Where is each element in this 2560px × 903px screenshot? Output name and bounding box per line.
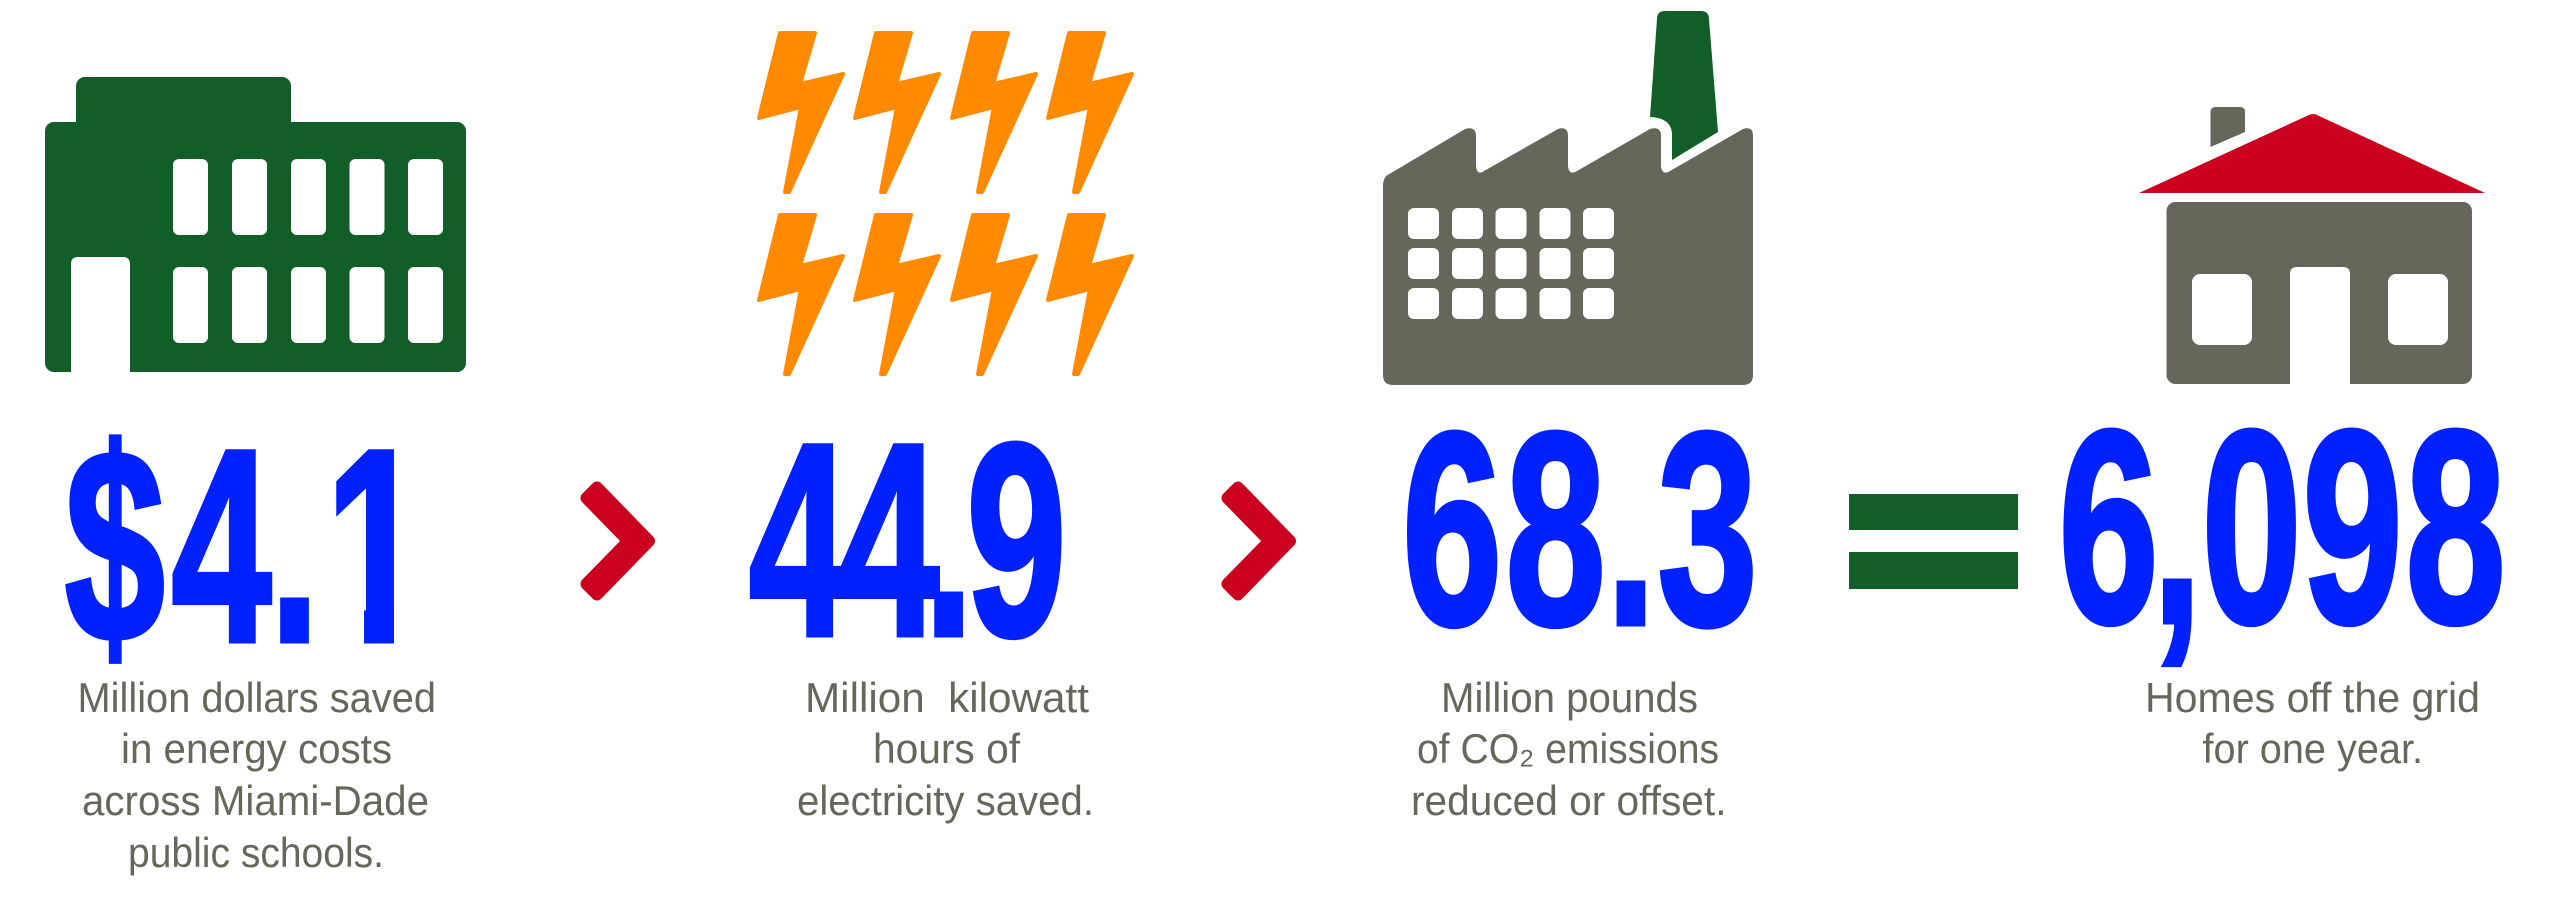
caption: CO2 reduced: Million pounds [1441, 674, 1698, 721]
caption: kilowatt hours saved [797, 674, 1094, 824]
icon: house [2139, 107, 2485, 384]
caption: kilowatt hours saved: Million kilowatt [805, 674, 1089, 721]
caption: homes off the grid [2145, 674, 2480, 772]
caption: kilowatt hours saved: electricity saved. [797, 777, 1094, 824]
caption: CO2 reduced [1411, 674, 1726, 824]
number: 68.3: 68.3 [1402, 377, 1758, 683]
caption: homes off the grid: for one year. [2202, 725, 2423, 772]
icon: equals sign [1849, 494, 2018, 589]
caption: dollars saved: public schools. [128, 829, 384, 876]
arrow: greater-than chevron 2 [1228, 488, 1290, 594]
caption: CO2 reduced: of CO₂ emissions [1417, 725, 1719, 772]
caption: dollars saved [78, 674, 436, 876]
number: 6,098: 6,098 [2058, 375, 2506, 681]
caption: homes off the grid: Homes off the grid [2145, 674, 2480, 721]
caption: kilowatt hours saved: hours of [873, 725, 1020, 772]
caption: dollars saved: across Miami-Dade [82, 777, 429, 824]
icon: eight lightning bolts [759, 33, 1132, 374]
caption: dollars saved: in energy costs [121, 725, 392, 772]
icon: school building [45, 77, 466, 372]
arrow: greater-than chevron 1 [586, 488, 649, 594]
icon: factory [1383, 11, 1753, 385]
number: 44.9: 44.9 [749, 388, 1067, 694]
caption: CO2 reduced: reduced or offset. [1411, 777, 1726, 824]
caption: dollars saved: Million dollars saved [78, 674, 436, 721]
number: $4.1: $4.1 [65, 394, 426, 700]
